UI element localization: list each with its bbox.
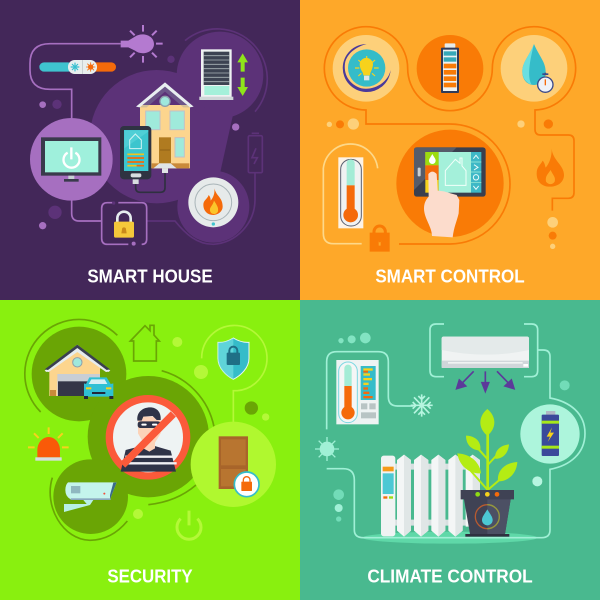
icon: battery — [441, 43, 459, 93]
background blobs — [32, 327, 209, 534]
circle: water background — [501, 35, 567, 102]
icon: fire sensor — [188, 177, 238, 227]
icon: monitor with power symbol — [41, 137, 101, 182]
title: security: SECURITY — [107, 566, 193, 587]
icon: power symbol — [177, 511, 201, 539]
icon: snowflake — [411, 394, 433, 417]
floor ellipse — [363, 532, 537, 544]
title: smart house: SMART HOUSE — [87, 266, 213, 287]
icon: hand — [424, 172, 459, 237]
panel: smart house — [0, 0, 300, 300]
icon: smart pot — [461, 490, 514, 537]
icon: fire — [537, 148, 564, 187]
circle: battery background — [520, 404, 580, 464]
icon: padlock — [370, 226, 390, 252]
decorative dots — [133, 337, 269, 519]
icon: car — [84, 377, 113, 399]
icon: garage house — [45, 345, 110, 396]
icon: up and down arrows — [237, 53, 248, 96]
icon: no burglar sign — [109, 399, 187, 476]
title: climate control: CLIMATE CONTROL — [367, 566, 533, 587]
icon: battery — [542, 411, 559, 456]
cream arc — [323, 144, 378, 244]
decorative dots — [333, 333, 570, 522]
connector lines — [324, 27, 576, 244]
icon: thermometer card — [338, 157, 363, 228]
icon: shield — [218, 338, 249, 379]
icon: tablet — [414, 147, 486, 197]
circle: battery background — [417, 35, 483, 102]
icon: plant — [457, 409, 517, 491]
panel: climate control — [300, 300, 600, 600]
icon: battery outline — [248, 133, 262, 173]
connector lines — [327, 324, 585, 538]
icon: alarm siren — [28, 427, 69, 461]
icon: house outline — [130, 325, 159, 361]
icon: security camera — [64, 482, 117, 512]
icon: window blind — [199, 49, 233, 100]
panel: security — [0, 300, 300, 600]
icon: radiator — [381, 455, 480, 537]
icon: water drop with timer — [522, 44, 553, 92]
icon: wall thermostat — [336, 360, 379, 424]
arcs — [25, 319, 214, 540]
temperature slider — [39, 60, 116, 74]
decorative dots — [39, 56, 239, 246]
icon: light bulb — [121, 25, 163, 63]
icon: door with lock — [219, 436, 259, 497]
panel: smart control — [300, 0, 600, 300]
title: smart control: SMART CONTROL — [375, 266, 525, 287]
circle: bulb dial — [333, 35, 399, 102]
icon: air flow arrows — [457, 371, 514, 391]
icon: smartphone — [120, 126, 151, 184]
circle: door background — [191, 422, 276, 507]
icon: bulb dial — [343, 44, 391, 92]
icon: air conditioner — [442, 337, 529, 368]
background blobs — [90, 32, 263, 243]
circle: monitor background — [30, 118, 113, 201]
shield arc — [202, 325, 267, 422]
connector lines — [30, 29, 267, 244]
icon: house — [136, 82, 194, 173]
icon: padlock — [114, 212, 134, 238]
icon: sun — [315, 437, 339, 461]
decorative dots — [327, 118, 558, 249]
circle: tablet background — [396, 130, 504, 237]
